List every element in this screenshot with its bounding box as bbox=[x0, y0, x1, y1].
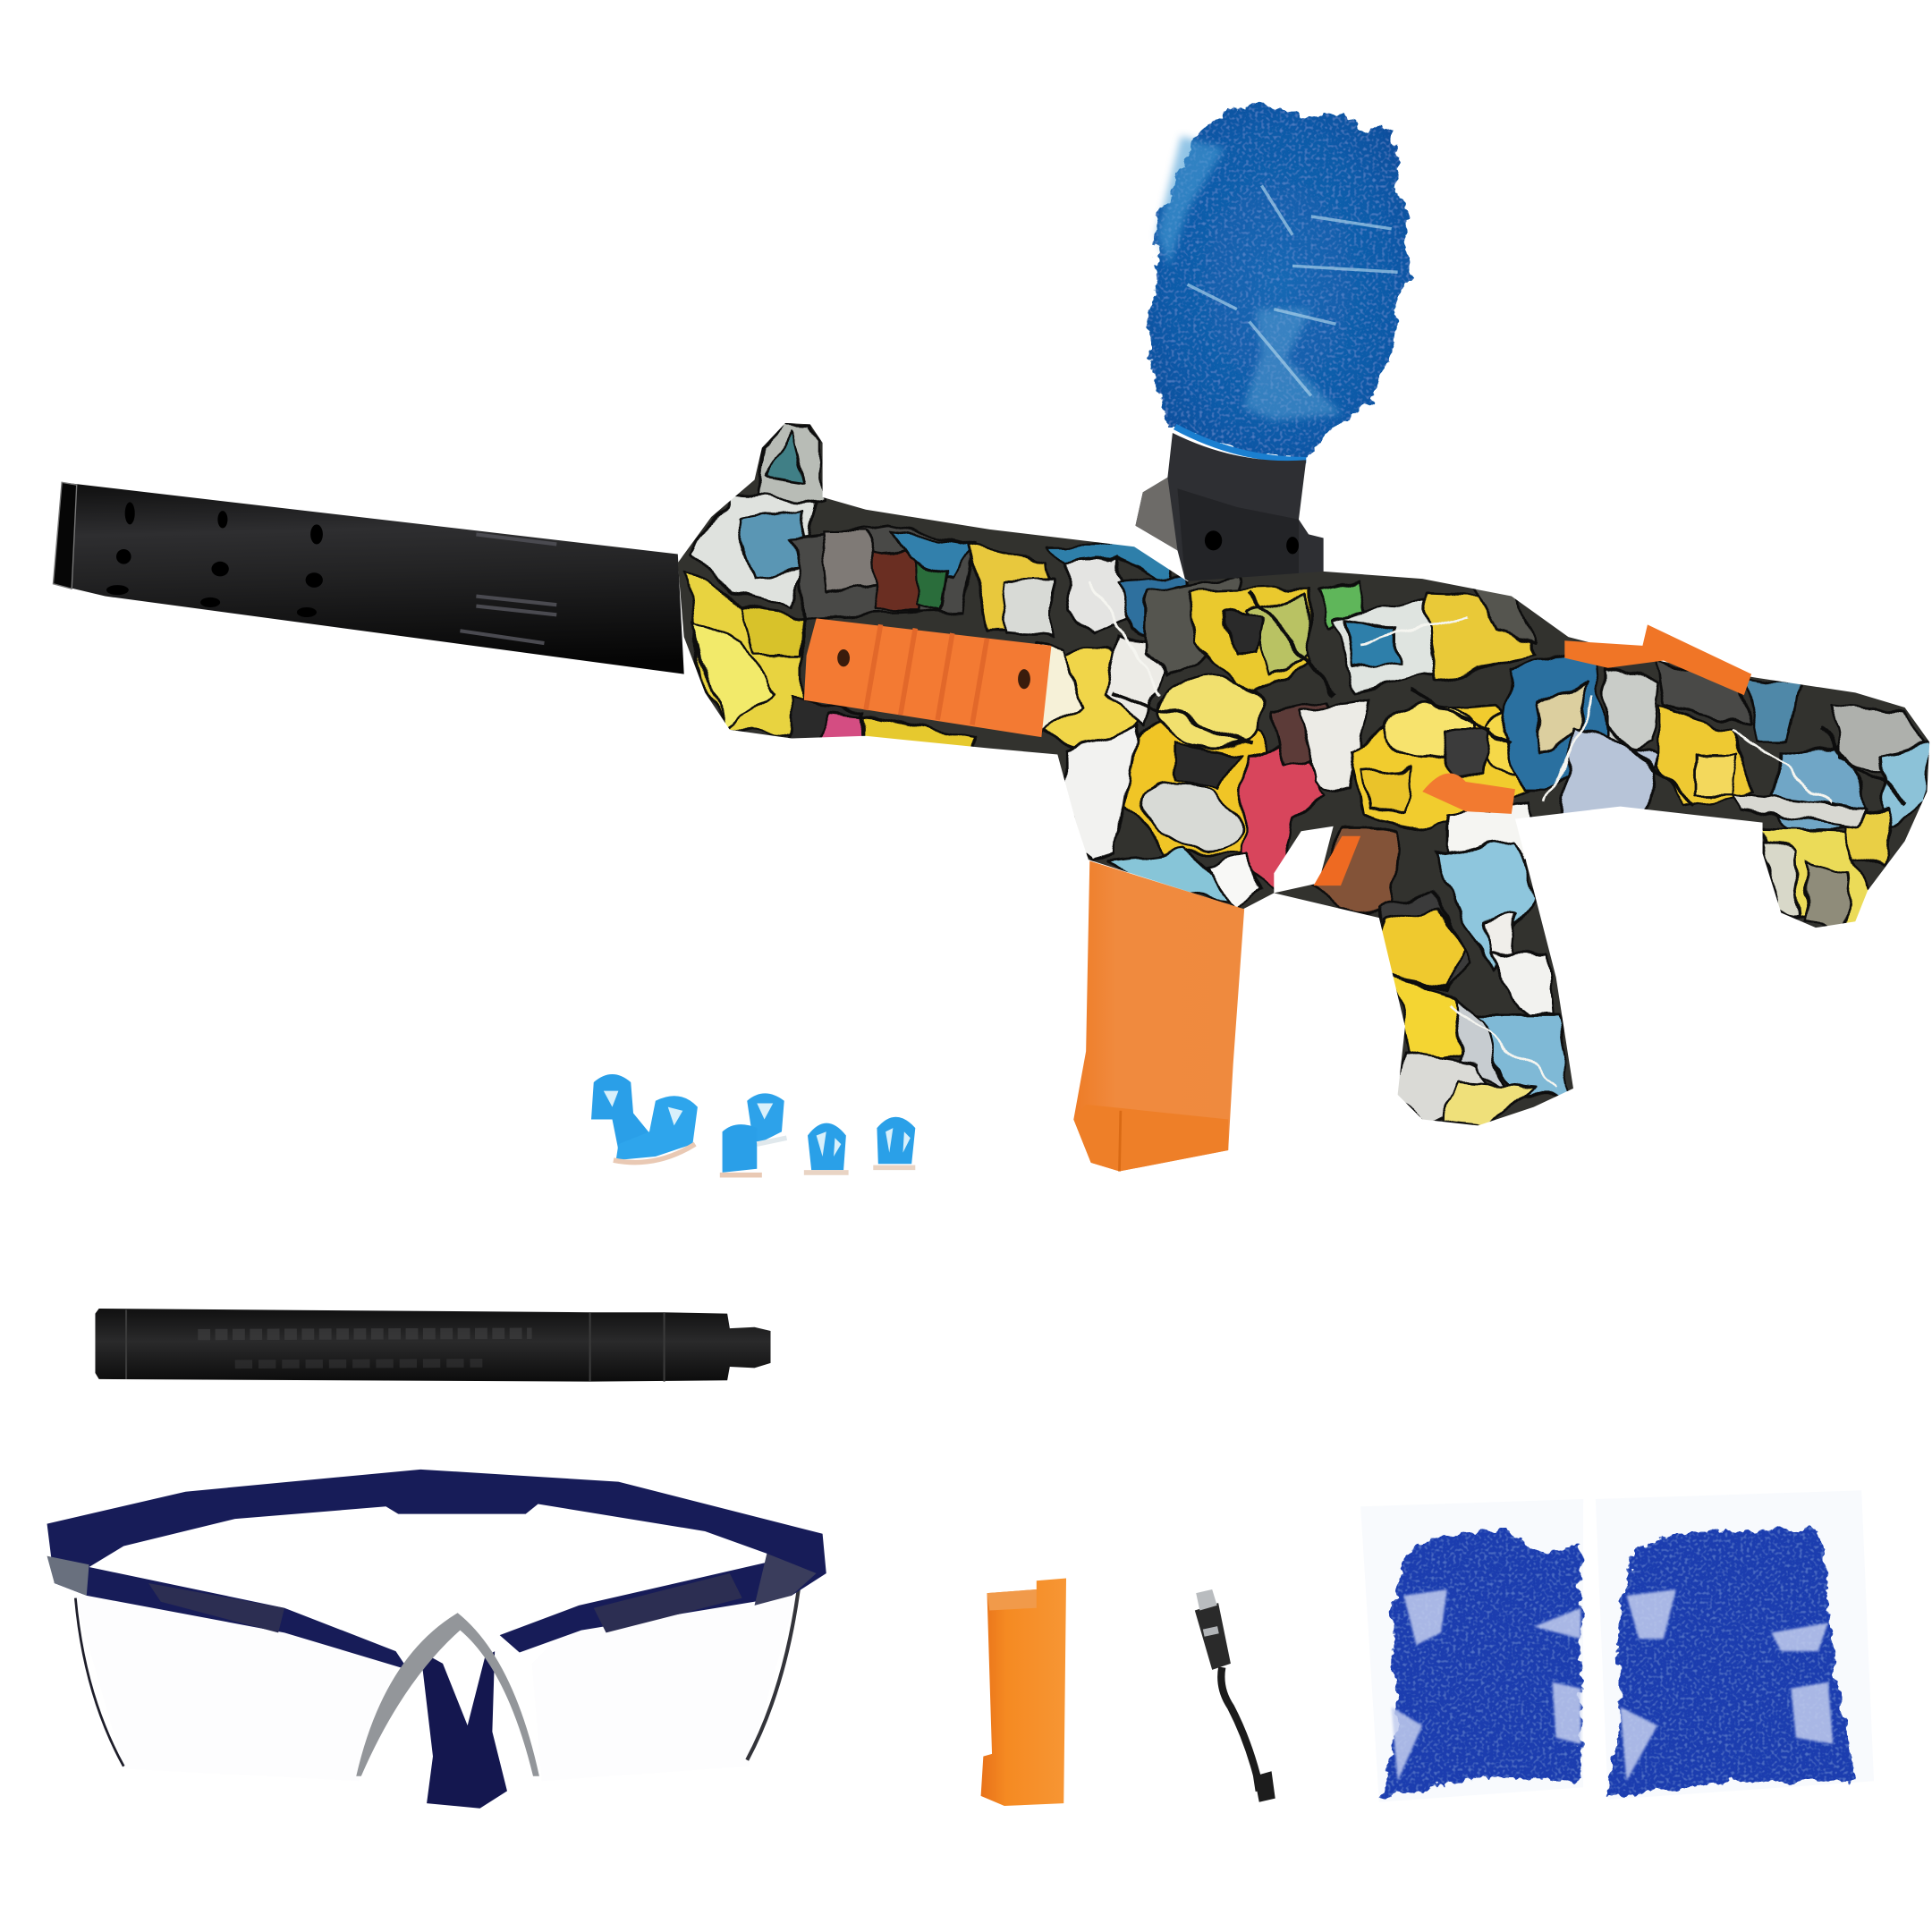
gel bead hopper bbox=[1148, 103, 1410, 460]
handguard graphics bbox=[686, 423, 1188, 757]
trigger guard opening bbox=[1274, 826, 1334, 893]
strap bbox=[420, 1651, 507, 1809]
blaster bbox=[53, 103, 1932, 1172]
trigger bbox=[1314, 836, 1360, 886]
accessory rail bbox=[804, 618, 1051, 737]
graffiti body bbox=[656, 408, 1932, 1150]
hopper adapter bbox=[1135, 433, 1324, 600]
target 3 bbox=[804, 1123, 849, 1173]
charging handle lever bbox=[1564, 624, 1751, 695]
blue target figures bbox=[591, 1074, 915, 1175]
target 2 bbox=[720, 1093, 786, 1175]
spare magazine battery bbox=[981, 1579, 1066, 1806]
grip graphics bbox=[1379, 841, 1573, 1128]
comic outlines bbox=[1089, 581, 1831, 1089]
target 1 bbox=[591, 1074, 698, 1163]
spare suppressor bbox=[95, 1309, 771, 1382]
gel bead bag left bbox=[1360, 1499, 1583, 1802]
magazine bbox=[1073, 860, 1244, 1172]
stock graphics bbox=[1503, 643, 1929, 928]
safety goggles bbox=[47, 1470, 826, 1809]
gel bead bag right bbox=[1596, 1490, 1874, 1800]
USB charging cable bbox=[1195, 1589, 1275, 1802]
nose piece bbox=[356, 1613, 539, 1776]
receiver graphics bbox=[1063, 575, 1547, 913]
barrel bbox=[53, 482, 684, 674]
target 4 bbox=[873, 1117, 915, 1167]
lens bbox=[74, 1586, 799, 1781]
selector nub bbox=[1422, 773, 1515, 814]
frame bbox=[47, 1470, 826, 1670]
